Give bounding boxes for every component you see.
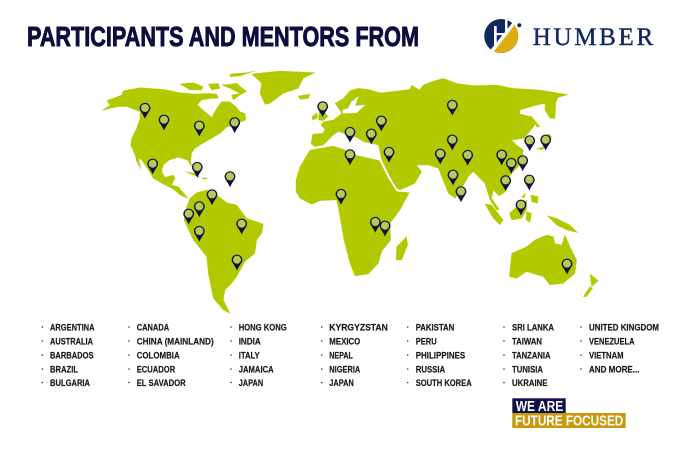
column 7: AND MORE... bbox=[589, 364, 640, 375]
column 5: RUSSIA bbox=[416, 364, 445, 375]
column 1: BULGARIA bbox=[50, 378, 90, 389]
column 2: EL SAVADOR bbox=[137, 378, 186, 389]
column 3: JAPAN bbox=[239, 378, 263, 389]
column 6: TUNISIA bbox=[512, 364, 543, 375]
column 6: SRI LANKA bbox=[512, 322, 554, 334]
column 7: UNITED KINGDOM bbox=[589, 322, 659, 334]
column 6: TAIWAN bbox=[512, 336, 542, 348]
Baltic sea bbox=[343, 97, 365, 113]
badge: we are future focused: WE ARE bbox=[516, 399, 564, 415]
column 6 bbox=[503, 322, 554, 389]
badge: we are future focused: FUTURE FOCUSED bbox=[515, 414, 623, 430]
column 7: VIETNAM bbox=[589, 350, 624, 362]
location pins bbox=[140, 100, 572, 275]
wordmark: HUMBER bbox=[533, 24, 654, 51]
column 4: NEPAL bbox=[329, 350, 353, 362]
column 4: KYRGYZSTAN bbox=[329, 322, 388, 334]
badge: we are future focused bbox=[512, 398, 626, 430]
column 3 bbox=[230, 322, 287, 389]
column 3: ITALY bbox=[239, 350, 260, 362]
Americas and Greenland bbox=[102, 71, 315, 313]
column 2: ECUADOR bbox=[137, 364, 175, 375]
column 4: JAPAN bbox=[329, 378, 354, 389]
column 2: COLOMBIA bbox=[137, 350, 180, 362]
column 4 bbox=[321, 322, 388, 389]
column 1 bbox=[42, 322, 95, 389]
column 2: CANADA bbox=[137, 322, 169, 334]
column 1: AUSTRALIA bbox=[50, 336, 93, 348]
column 5 bbox=[407, 322, 472, 389]
column 4: MEXICO bbox=[329, 336, 360, 348]
column 7: VENEZUELA bbox=[589, 336, 635, 348]
column 5: PERU bbox=[416, 336, 437, 348]
column 2 bbox=[128, 322, 214, 389]
column 6: UKRAINE bbox=[512, 378, 548, 389]
column 4: NIGERIA bbox=[329, 364, 360, 375]
column 3: HONG KONG bbox=[239, 322, 287, 334]
column 1: BARBADOS bbox=[50, 350, 94, 362]
column 3: INDIA bbox=[239, 336, 261, 348]
icon: Humber emblem bbox=[484, 19, 522, 53]
title: PARTICIPANTS AND MENTORS FROM bbox=[27, 21, 419, 52]
column 6: TANZANIA bbox=[512, 350, 551, 362]
column 1: BRAZIL bbox=[50, 364, 78, 375]
column 1: ARGENTINA bbox=[50, 322, 95, 334]
Eurasia, Africa and Oceania bbox=[296, 78, 598, 297]
column 2: CHINA (MAINLAND) bbox=[137, 336, 214, 348]
country list bbox=[42, 322, 659, 389]
column 5: PAKISTAN bbox=[416, 322, 454, 334]
column 5: SOUTH KOREA bbox=[416, 378, 472, 389]
Humber logo bbox=[484, 19, 654, 53]
column 5: PHILIPPINES bbox=[416, 350, 465, 362]
world map bbox=[102, 71, 598, 313]
column 7 bbox=[580, 322, 659, 375]
column 3: JAMAICA bbox=[239, 364, 274, 375]
